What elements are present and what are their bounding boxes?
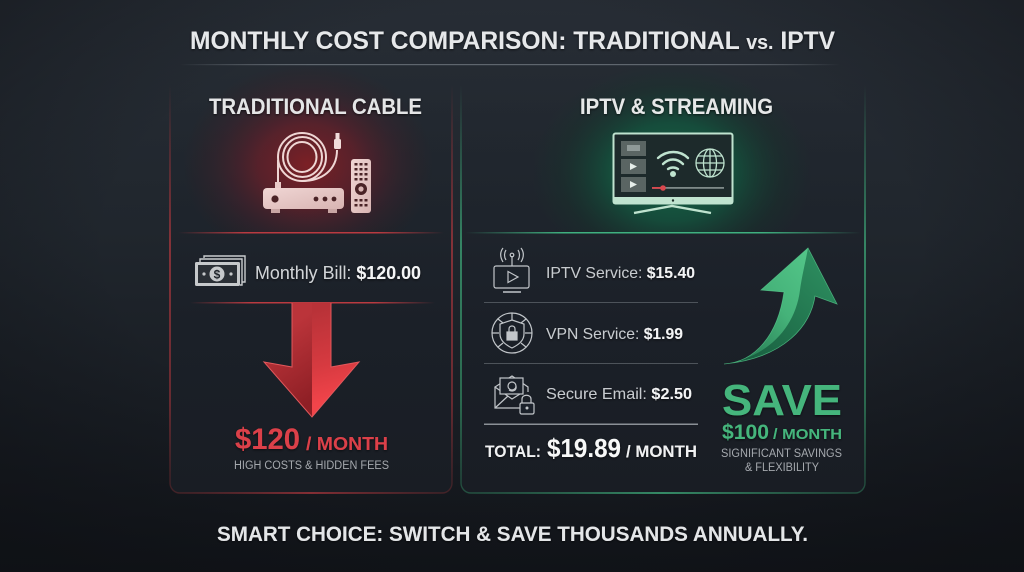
- row: IPTV service: [494, 248, 695, 292]
- text: high costs and hidden fees: HIGH COSTS & HIDDEN FEES: [234, 460, 389, 472]
- text: IPTV service price: IPTV Service: $15.40: [546, 265, 695, 282]
- icon: smart tv: [613, 134, 733, 213]
- text: total: / MONTH: [626, 443, 697, 461]
- panel background: [170, 80, 452, 493]
- icon: cable, box and remote: [263, 133, 371, 213]
- heading: traditional cable: TRADITIONAL CABLE: [209, 94, 422, 119]
- text: $120 per month: [235, 423, 388, 456]
- panel background: [461, 80, 865, 493]
- icon: envelope with lock: [495, 376, 534, 414]
- icon: shield globe: [492, 313, 532, 353]
- text: total: TOTAL:: [485, 443, 541, 461]
- panel: IPTV and streaming: [461, 66, 865, 493]
- text: save: SAVE: [722, 376, 842, 425]
- text: significant savings and flexibility: [721, 448, 842, 474]
- text: $100 per month: [722, 421, 842, 444]
- heading: IPTV and streaming: IPTV & STREAMING: [580, 94, 773, 119]
- icon: cash stack: [195, 256, 245, 286]
- text: significant savings and flexibility: & FLEXIBILITY: [745, 462, 819, 474]
- text: monthly bill: Monthly Bill: $120.00: [255, 263, 421, 283]
- text: total: [485, 433, 697, 463]
- text: total: $19.89: [547, 433, 621, 463]
- icon: broadcast tv: [494, 248, 529, 292]
- red glow behind icon: [172, 66, 450, 232]
- text: $120 per month: / MONTH: [306, 433, 388, 454]
- text: $120 per month: $120: [235, 423, 300, 456]
- icon: cash stack: $: [214, 268, 221, 282]
- footer statement: SMART CHOICE: SWITCH & SAVE THOUSANDS ANNUALLY.: [217, 523, 808, 546]
- text: significant savings and flexibility: SIGNIFICANT SAVINGS: [721, 448, 842, 460]
- text: VPN service price: VPN Service: $1.99: [546, 326, 683, 343]
- row: VPN service: [492, 313, 683, 353]
- panel side borders: [461, 85, 865, 483]
- arrow: cost going down: [264, 303, 359, 417]
- title: MONTHLY COST COMPARISON: TRADITIONAL vs. IPTV: [190, 27, 835, 55]
- arrow: savings going up: [724, 248, 837, 364]
- panel bottom border: [170, 483, 452, 493]
- panel bottom border: [461, 483, 865, 493]
- panel: traditional cable: [170, 66, 452, 493]
- text: $100 per month: / MONTH: [773, 426, 842, 443]
- text: $100 per month: $100: [722, 421, 769, 444]
- green glow behind icon: [463, 66, 863, 233]
- row: secure email: [495, 376, 692, 414]
- panel side borders: [170, 85, 452, 483]
- text: secure email price: Secure Email: $2.50: [546, 386, 692, 403]
